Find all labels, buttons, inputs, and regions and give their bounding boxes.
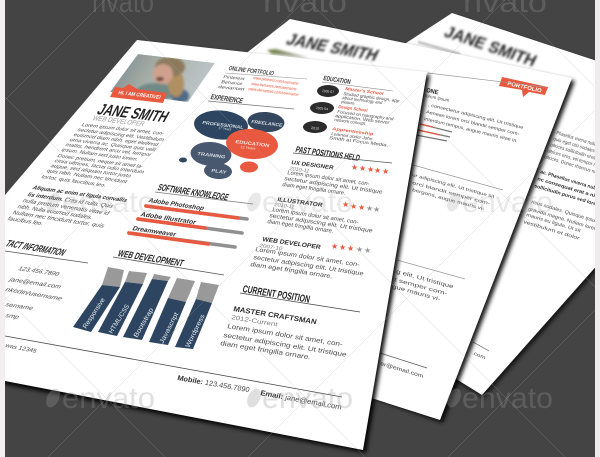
education: Studied graphic design, app <box>343 91 401 103</box>
rating stars: ux designer: ★ <box>374 166 381 175</box>
rating stars: web developer: ★ <box>364 246 371 255</box>
photo <box>110 54 215 103</box>
footer contact line <box>5 336 342 412</box>
second page heading: ONE <box>426 87 439 96</box>
education: Learned under John <box>331 131 374 141</box>
current position: Lorem ipsum dolor sit amet, con- <box>227 323 343 348</box>
watermark: envato top row on background <box>92 0 547 19</box>
bold paragraph: nibh. Nulla euismod sodales. <box>16 204 94 221</box>
intro paragraph: ipsum. Nullam sed justo lorem. <box>60 147 140 163</box>
position: web developer: Lorem ipsum dolor sit amet, con- <box>254 246 360 269</box>
second page text: orci blandit semper com- <box>412 180 492 206</box>
bold paragraph: Aliquam ac enim et ligula convallis <box>31 185 128 204</box>
portfolio tag <box>499 77 548 97</box>
education: Master's School <box>345 86 384 96</box>
skill bars: software: Adobe Photoshop <box>147 197 205 212</box>
education <box>303 75 401 148</box>
intro paragraph: sectetur adipiscing elit. Vestibulum <box>76 127 166 143</box>
contact information: nkedin/username <box>4 287 64 303</box>
position: web developer: sectetur adipiscing elit. Ut tristique <box>252 254 365 278</box>
current position <box>220 284 360 361</box>
education: 2005-07 <box>322 89 334 94</box>
second page text: gue mauris vi- <box>392 284 441 303</box>
third page text: ac. Phasellus viverra nulla <box>539 169 600 192</box>
bar chart: web development: HTML/CSS <box>108 303 132 335</box>
rating stars: illustrator: ★ <box>358 203 365 212</box>
left edge strip <box>0 0 5 457</box>
rating stars: illustrator: ★ <box>373 205 380 214</box>
education: 2010 <box>311 126 319 131</box>
contact information: TACT INFORMATION <box>3 239 68 259</box>
second page text: ur adipiscing elit. Ut tristique sit <box>412 172 496 199</box>
intro paragraph: urna viverra ac. Quisque quis velit <box>68 137 158 153</box>
past positions held heading: PAST POSITIONS HELD <box>294 144 361 163</box>
intro paragraph: Lorem ipsum dolor sit amet, con- <box>80 122 166 137</box>
current position: CURRENT POSITION <box>241 284 311 306</box>
position: illustrator: diam eget fringilla ornare. <box>266 219 335 235</box>
intro paragraph: mattis, hendrerit arcu vel, tempor <box>64 142 153 158</box>
experience heading <box>208 92 294 109</box>
third page text: .com <box>471 351 486 361</box>
education: pleasure. <box>341 99 356 106</box>
software knowledge heading: SOFTWARE KNOWLEDGE <box>156 182 230 203</box>
red creative tag: HI, I AM CREATIVE! <box>117 90 162 101</box>
education: Design School <box>338 104 368 113</box>
intro paragraph: cinia ultrices, lacus odio interdum <box>53 158 146 175</box>
rating stars: illustrator <box>342 201 380 212</box>
education: 2001-04 <box>316 106 328 111</box>
watermark: envato mid row: envato <box>62 186 155 219</box>
online portfolio: Pinterest <box>223 74 247 81</box>
education: Apprenticeship <box>332 126 375 136</box>
second page text: g elit. Ut tristique <box>396 269 454 290</box>
position: ux designer: sectetur adipiscing elit. Ut tristique <box>283 176 383 196</box>
contact information: smp <box>4 313 21 321</box>
third page text: risus sodales. Quisque ipsum <box>530 199 600 225</box>
rating stars: ux designer: ★ <box>367 165 374 174</box>
bold paragraph: Nullam nec tincidunt tortor, quis <box>11 210 106 229</box>
bar chart: web development: Javascript <box>159 311 180 345</box>
bold paragraph: nulla pretium venenatis vitae id <box>21 198 110 217</box>
second page photo strip <box>267 49 310 58</box>
current position: diam eget fringilla ornare. <box>220 340 311 361</box>
skill bars: software: Adobe Illustrator <box>139 211 198 226</box>
second page text: lorem ipsum <box>425 93 450 103</box>
second page text: , consectetur adipiscing elit. Ut tristique <box>428 102 524 130</box>
second page text <box>380 93 524 380</box>
second page text: bergons, augue mauris vi- <box>412 187 485 212</box>
online portfolio: www.behance.net/username <box>251 81 298 91</box>
position: ux designer: UX DESIGNER <box>290 160 334 171</box>
education: EDUCATION <box>322 75 352 86</box>
current position: MASTER CRAFTSMAN <box>233 305 317 326</box>
bar chart: web development: Responsive <box>82 297 107 330</box>
rating stars: web developer <box>332 243 370 253</box>
bold paragraph <box>6 185 128 229</box>
experience heading: EXPERIENCE <box>209 92 245 105</box>
online portfolio: www.deviantart.com/username <box>248 86 300 97</box>
position: web developer <box>249 236 365 280</box>
online portfolio: www.pinterest.com/username <box>253 75 300 86</box>
watermark: envato mid row: envato <box>262 186 353 219</box>
second page text: Aenean lorem orci blandit semper com- <box>426 109 520 136</box>
watermark: envato bottom row: envato <box>62 382 155 415</box>
education: application. Web server <box>335 113 391 125</box>
third page text: mauris eu ligula. Ut sit <box>525 212 582 234</box>
bubble chart: experience: PLAY <box>211 168 227 175</box>
rating stars: ux designer <box>352 164 388 174</box>
bar chart: web development: Wordpress <box>185 313 207 349</box>
watermark: envato mid row: envato <box>462 186 553 219</box>
bold paragraph: lis interdum. Cras id nulla. Quis <box>26 192 115 210</box>
online portfolio <box>218 65 307 97</box>
intro paragraph: augue, sed aliquam tortor justo <box>49 163 133 179</box>
position: ux designer: diam eget fringilla ornare. <box>281 182 347 197</box>
watermark: envato bottom row: envato <box>262 382 353 415</box>
position: web developer: WEB DEVELOPER <box>261 236 322 251</box>
position: web developer: 2007-10 <box>258 243 283 252</box>
education: Focused on typography and <box>337 109 395 121</box>
intro paragraph: quis nibh. Nullam nec tincidunt <box>45 168 129 185</box>
skill bars: software: Dreamweaver <box>131 225 178 238</box>
position: illustrator: ILLUSTRATOR <box>276 197 324 209</box>
footer contact line: Email: jane@email.com <box>260 389 342 412</box>
position: ux designer: 2010-11 <box>288 166 310 175</box>
rating stars: web developer: ★ <box>331 242 338 251</box>
contact information: 123.456.7890 <box>17 266 61 278</box>
job title: WEB DEVELOPER <box>91 115 146 128</box>
panel: third resume page <box>406 13 595 399</box>
contact information <box>3 239 88 355</box>
position: illustrator: 2010-11 <box>273 202 295 211</box>
watermark: envato bottom row <box>46 388 552 408</box>
panel: second resume page <box>235 19 575 423</box>
current position: sectetur adipiscing elit. Ut tristique <box>223 332 348 359</box>
third page text: vestibulum et dolor <box>522 219 581 242</box>
third page name: JANE SMITH <box>441 23 539 70</box>
rating stars: illustrator: ★ <box>350 202 357 211</box>
intro paragraph: Donec pretium, neque sit amet la- <box>56 153 145 170</box>
panel: front resume page <box>3 40 430 453</box>
online portfolio: Behance <box>221 79 244 86</box>
contact information: sername <box>4 302 35 312</box>
position: illustrator: Lorem ipsum dolor sit amet, con- <box>271 207 359 226</box>
rating stars: illustrator: ★ <box>342 200 349 209</box>
watermark: envato bottom row: envato <box>462 382 553 415</box>
name heading: JANE SMITH <box>94 101 172 126</box>
contact information: jane@email.com <box>7 277 62 291</box>
position: ux designer: Lorem ipsum dolor sit amet, con- <box>286 170 370 187</box>
bar chart: web development <box>73 267 219 349</box>
intro paragraph: euismod diam nibh, eget eleifend <box>72 132 160 148</box>
online portfolio: deviantart <box>218 84 247 92</box>
bubble chart: experience: FREELANCE <box>251 119 283 128</box>
second page text: er@email.com <box>380 361 424 380</box>
rating stars: ux designer: ★ <box>351 163 358 172</box>
bubble chart: experience: TRAINING <box>197 151 227 159</box>
education: network concept. <box>334 117 367 126</box>
bubble chart: experience <box>179 109 285 180</box>
rating stars: web developer: ★ <box>347 244 354 253</box>
rating stars: web developer: ★ <box>339 243 346 252</box>
bold paragraph: faucibus leo. <box>6 216 45 227</box>
online portfolio: ONLINE PORTFOLIO <box>227 65 275 77</box>
third page text <box>471 130 600 361</box>
watermark: envato mid row <box>46 192 552 212</box>
intro paragraph: tortor, quis faucibus leo. <box>40 174 107 189</box>
education: Smith at Focus Media. <box>329 135 389 148</box>
web development heading: WEB DEVELOPMENT <box>116 248 186 269</box>
third page text: gravida magna. Nullam lorem <box>527 206 599 233</box>
rating stars: illustrator: ★ <box>366 204 373 213</box>
position: illustrator: sectetur adipiscing elit. Ut tristique <box>268 213 373 234</box>
bubble chart: experience: PROFESSIONAL <box>202 120 244 130</box>
red creative tag <box>110 84 167 103</box>
contact information: was 12345 <box>4 343 38 355</box>
second page skill bars <box>416 124 452 141</box>
footer contact line: Mobile: 123.456.7890 <box>177 374 250 394</box>
second page text: t semper com- <box>394 277 448 297</box>
rating stars: ux designer: ★ <box>382 167 389 176</box>
right edge strip <box>595 0 600 457</box>
second page text: interdum tempus, augue mauris vitae in <box>424 116 517 143</box>
education: about technology and <box>342 95 384 105</box>
software knowledge heading <box>155 182 253 204</box>
bubble chart: experience: 17 Years <box>218 126 232 132</box>
bubble chart: experience: 12 Years <box>240 145 256 151</box>
third page text: sollicitudin purus sed lorem <box>533 183 600 209</box>
position: ux designer <box>281 160 383 197</box>
current position: 2012-Current <box>231 314 279 328</box>
position: illustrator <box>266 197 373 235</box>
rating stars: ux designer: ★ <box>359 164 366 173</box>
position: web developer: diam eget fringilla ornare. <box>249 261 334 280</box>
bubble chart: experience: EDUCATION <box>235 139 271 148</box>
portfolio tag: PORTFOLIO <box>506 81 543 95</box>
skill bars: software <box>129 197 247 247</box>
third page text: ultrices. Donec rhoncus nisi <box>543 154 599 176</box>
bar chart: web development: Bootstrap <box>133 307 155 339</box>
rating stars: web developer: ★ <box>356 245 363 254</box>
second page name: JANE SMITH <box>283 30 382 65</box>
intro paragraph <box>40 122 166 189</box>
third page text: nc consequat erat a nisl <box>536 176 600 201</box>
